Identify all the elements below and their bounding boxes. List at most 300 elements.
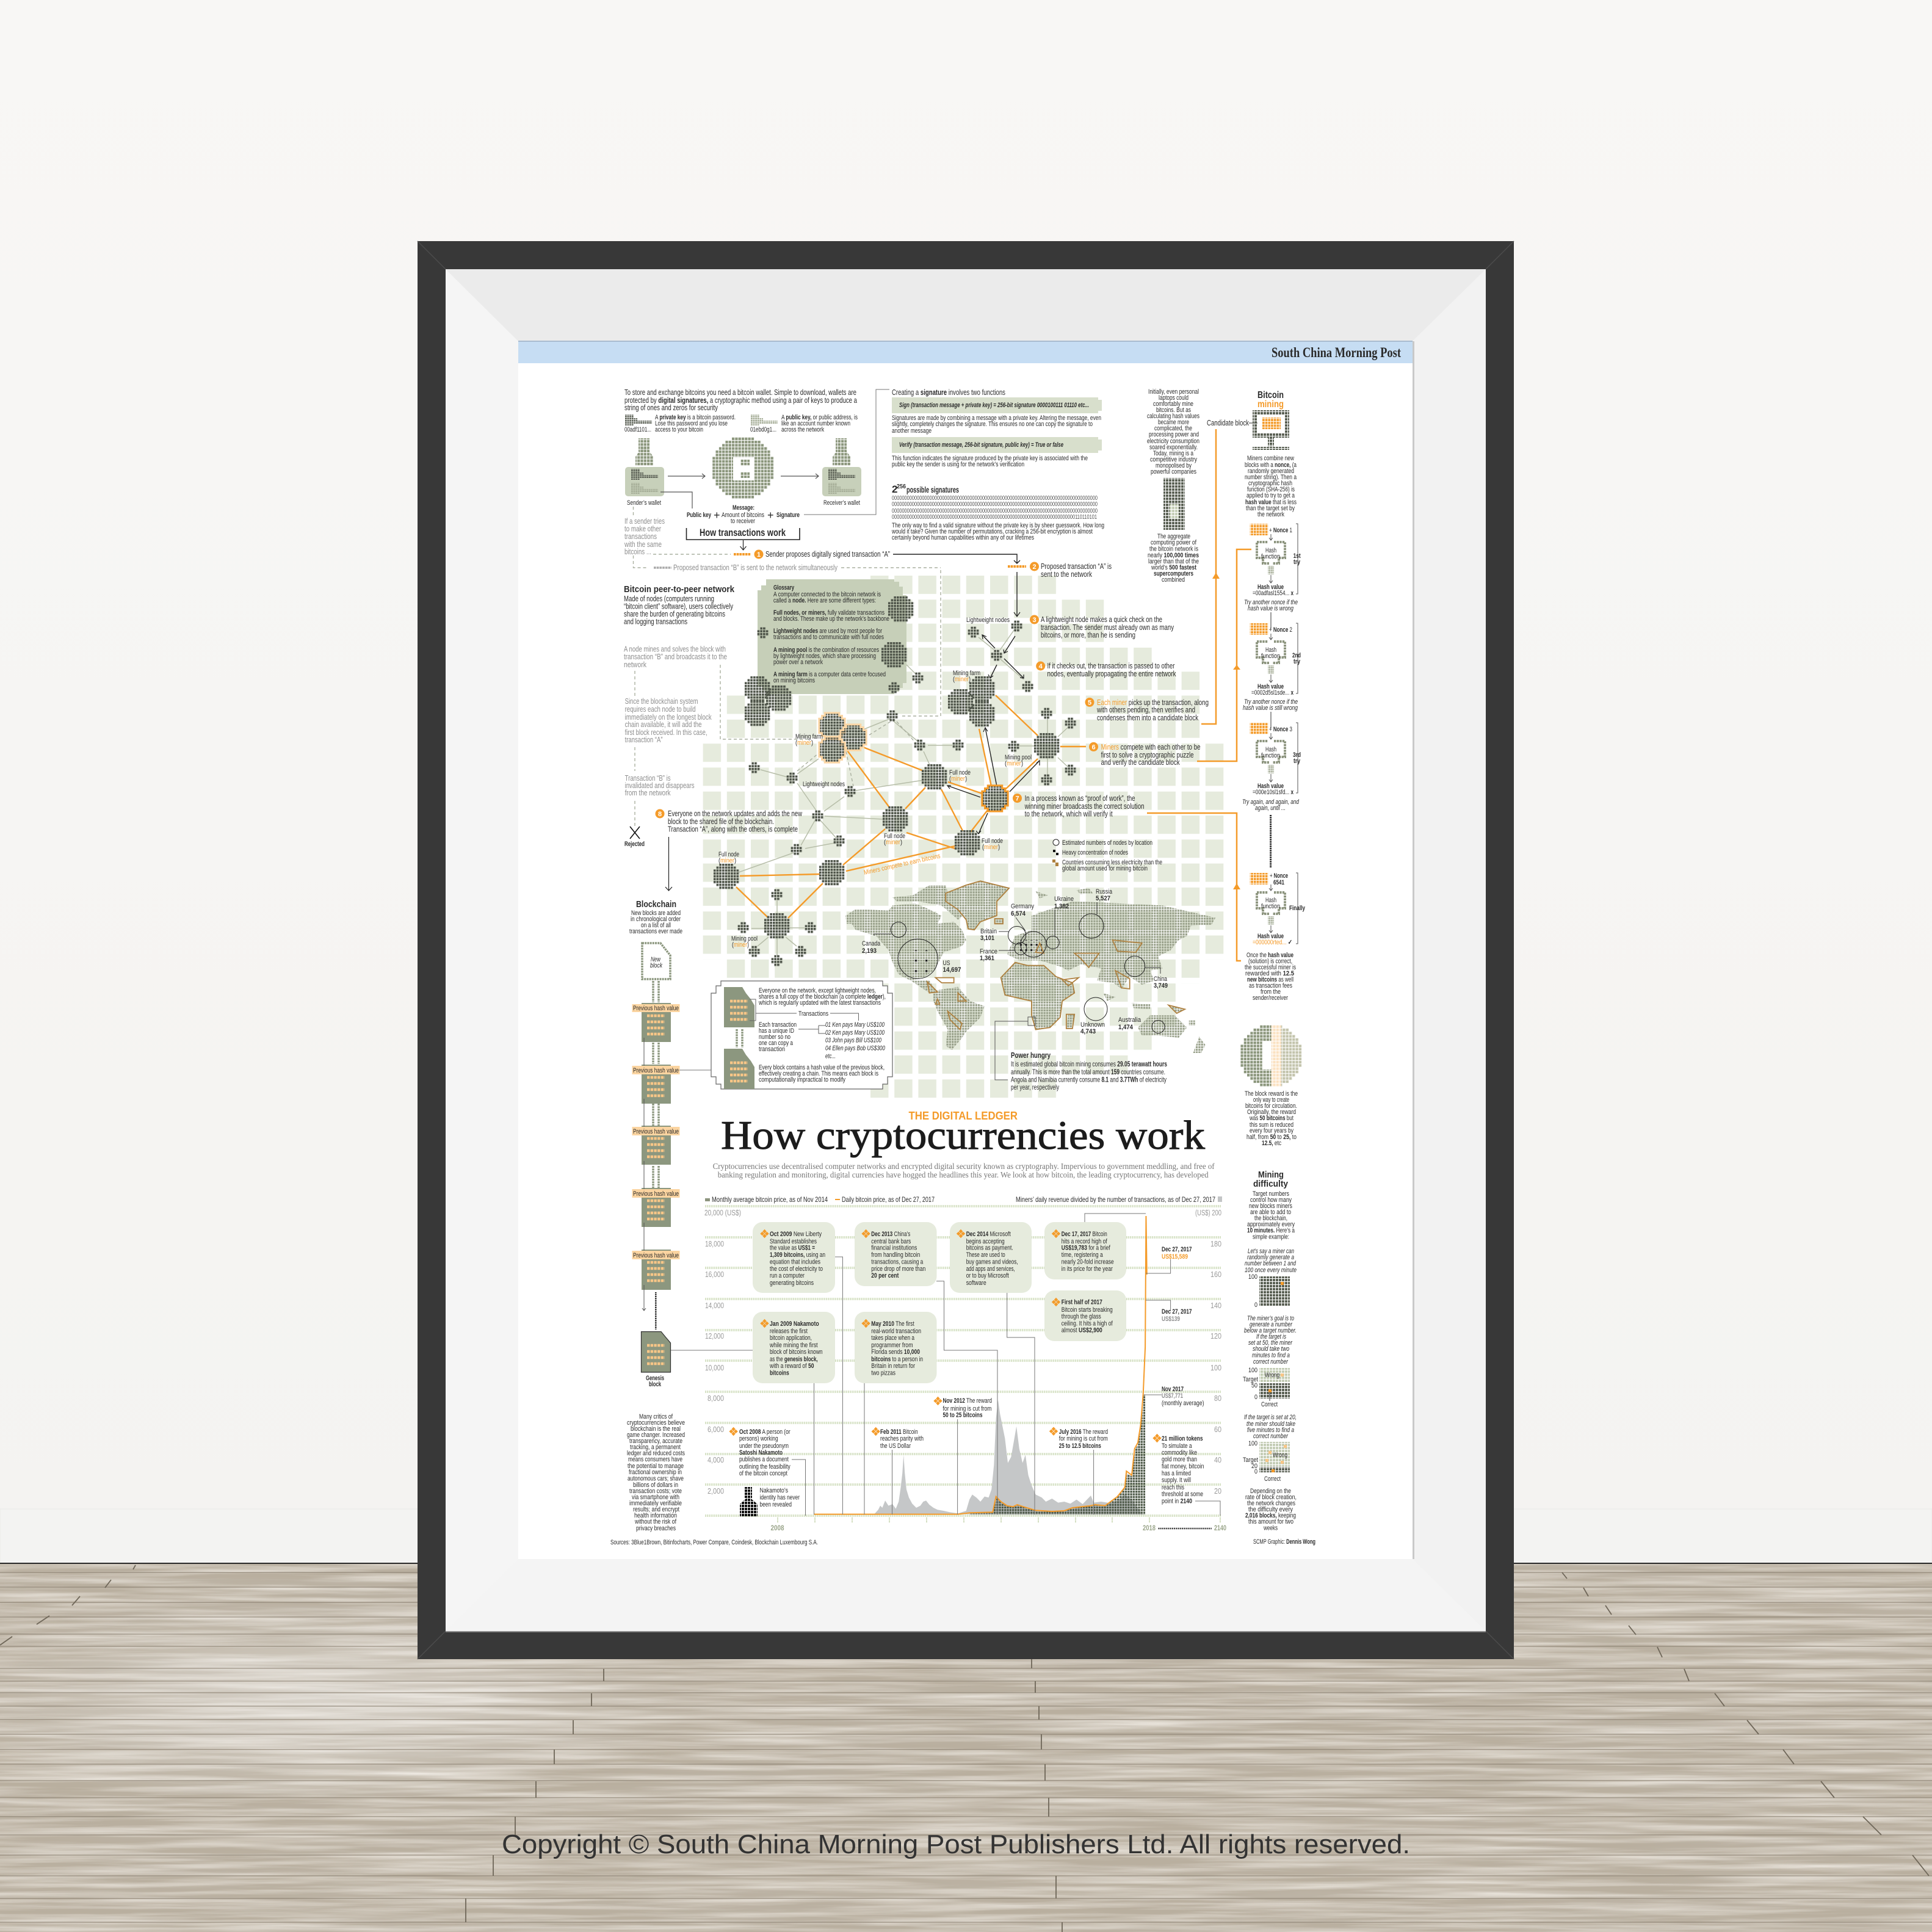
successful miner text: rewarded with 12.5: [1245, 970, 1294, 977]
price chart: [814, 1216, 1147, 1514]
final try: Finally: [1289, 905, 1306, 912]
panel: ledger callout: etc...: [825, 1052, 836, 1060]
third try: Hash value: [1257, 783, 1284, 790]
price callouts: US$139: [1162, 1315, 1180, 1323]
event: Oct 2009: 1,309 bitcoins, using an: [770, 1251, 825, 1259]
2^256 possible signatures: 0000000000000000000000000000000000000000000000000000000000000000000000000110110101: [892, 514, 1097, 521]
event: Oct 2009: Oct 2009 New Liberty: [770, 1231, 822, 1238]
panel: mining difficulty: randomly generate a: [1247, 1254, 1294, 1261]
final try: [1250, 872, 1306, 946]
chart axis labels: (US$) 200: [1195, 1209, 1221, 1217]
first try: [1244, 524, 1301, 629]
panel: ledger callout: computationally impractical to modify: [759, 1076, 845, 1084]
intro text: wallets: To store and exchange bitcoins you need a bitcoin wallet. Simple to download, wallets are: [624, 388, 856, 397]
message label: Amount of bitcoins: [722, 512, 764, 519]
panel: ledger callout: Transactions: [798, 1010, 828, 1018]
event: Dec 17, 2017: [1044, 1222, 1126, 1279]
map labels: 14,697: [942, 966, 961, 974]
event: May 2010: programmer from: [871, 1342, 913, 1349]
critics text: cryptocurrencies believe: [627, 1419, 685, 1427]
panel: ledger callout: shares a full copy of the blockchain (a complete ledger),: [759, 993, 886, 1000]
step 5: [1085, 698, 1209, 722]
grey narrative: rejected transaction B: invalidated and disappears: [625, 781, 695, 790]
final try: =000000rted... ✓: [1253, 939, 1292, 946]
panel: ledger callout: 02 Ken pays Mary US$100: [825, 1029, 885, 1037]
message label: Message:: [733, 504, 754, 512]
chart axis labels: 180: [1210, 1240, 1221, 1248]
event: Oct 2008: Satoshi Nakamoto: [739, 1449, 783, 1456]
event: May 2010: Britain in return for: [871, 1362, 915, 1370]
chart axis labels: 120: [1210, 1332, 1221, 1340]
icon: private key: [625, 414, 652, 425]
title block: banking regulation and monitoring, digital currencies have hogged the headlines this year. We look at how bitcoin, the leading cryptocurrency, has developed: [718, 1170, 1209, 1179]
critics text: transparency, accurate: [629, 1438, 682, 1445]
event: Dec 2014: software: [966, 1279, 986, 1287]
previous hash value labels: Previous hash value: [633, 1067, 679, 1074]
first try: Hash: [1265, 547, 1276, 554]
map legend: Estimated numbers of nodes by location: [1062, 839, 1152, 847]
signature explainer: This function indicates the signature produced by the private key is associated with the: [892, 455, 1088, 462]
mining explanation: function (SHA-256) is: [1247, 486, 1295, 493]
successful miner text: as transaction fees: [1249, 982, 1292, 990]
map labels: 1,382: [1054, 903, 1069, 910]
peer-to-peer text: share the burden of generating bitcoins: [624, 609, 725, 618]
critics text: billions of dollars in: [633, 1482, 678, 1489]
successful miner text: from the: [1261, 988, 1281, 996]
node labels: Mining pool: [731, 935, 758, 942]
critics text: privacy breaches: [636, 1525, 676, 1532]
grey narrative: rejected transaction B: [624, 645, 727, 797]
event: first half of 2017: First half of 2017: [1062, 1299, 1102, 1306]
critics text: without the risk of: [634, 1518, 677, 1525]
panel: block reward: half, from 50 to 25, to: [1246, 1134, 1297, 1141]
step 6: 6: [1091, 743, 1096, 751]
panel: mining difficulty: If the target is set at 20,: [1244, 1414, 1297, 1421]
map labels: France: [980, 948, 997, 955]
intro text: wallets: string of ones and zeros for security: [624, 403, 718, 412]
panel: mining difficulty: five minutes to find a: [1247, 1427, 1294, 1434]
step 7: [1013, 794, 1145, 818]
map labels: 3,101: [980, 935, 994, 942]
middle column: computing power: calculating hash values: [1147, 413, 1199, 420]
second try: hash value is still wrong: [1243, 704, 1298, 712]
panel: mining difficulty: are able to add to: [1250, 1209, 1291, 1216]
2^256 possible signatures: [891, 483, 1104, 541]
middle column: computing power: electricity consumption: [1147, 438, 1199, 445]
map labels: Australia: [1118, 1016, 1141, 1024]
first try: 1st: [1293, 552, 1301, 560]
step 8: Everyone on the network updates and adds the new: [668, 809, 802, 818]
grey narrative: rejected transaction B: transaction “A”: [625, 735, 663, 744]
title block: How cryptocurrencies work: [721, 1113, 1206, 1158]
orange process arrows to mining column: [1147, 429, 1251, 961]
signature explainer: another message: [892, 427, 932, 435]
private key text: Lose this password and you lose: [655, 420, 728, 427]
price callouts: Nov 2017: [1162, 1386, 1184, 1393]
second try: =0002d5sl1sde... x: [1251, 689, 1294, 696]
mining explanation: blocks with a nonce, (a: [1245, 461, 1297, 469]
panel: mining difficulty: If the target is: [1256, 1333, 1286, 1340]
peer-to-peer text: [624, 584, 735, 626]
event: May 2010: [855, 1312, 936, 1383]
icon: half coin: [1240, 1026, 1302, 1087]
event: Dec 17, 2017: in its price for the year: [1062, 1265, 1113, 1273]
icon: new block: [642, 943, 670, 979]
node labels: (miner): [1005, 760, 1023, 767]
final try: Hash: [1265, 897, 1276, 904]
event: Oct 2009: [753, 1222, 835, 1293]
middle column: computing power: soared exponentially.: [1149, 444, 1198, 451]
panel: mining difficulty: Let’s say a miner can: [1248, 1248, 1294, 1255]
final try: 6541: [1273, 879, 1284, 886]
grey narrative: rejected transaction B: requires each node to build: [625, 704, 696, 714]
successful miner text: sender/receiver: [1253, 994, 1288, 1002]
event: Jan 2009: releases the first: [770, 1328, 808, 1335]
panel: block reward: [1240, 1026, 1302, 1147]
chart: target 20 grid: 100: [1248, 1440, 1257, 1447]
price callouts: Dec 27, 2017: [1162, 1308, 1192, 1315]
grey links: [739, 629, 1068, 955]
mining explanation: applied to try to get a: [1246, 492, 1295, 499]
chart axis labels: 10,000: [705, 1364, 724, 1372]
event: Feb 2011: the US Dollar: [880, 1442, 911, 1450]
mining explanation: hash value that is less: [1245, 499, 1297, 506]
node labels: Full node: [982, 838, 1003, 845]
mining explanation: cryptographic hash: [1248, 480, 1292, 487]
mining explanation: [1245, 455, 1297, 518]
middle column: computing power: Today, mining is a: [1153, 450, 1194, 457]
node labels: (miner): [949, 775, 967, 783]
peer-to-peer text: and logging transactions: [624, 617, 687, 626]
chart axis labels: 4,000: [707, 1456, 724, 1464]
signature explainer: public key the sender is using for the network’s verification: [892, 461, 1024, 468]
second try: function: [1261, 653, 1280, 660]
network connection lines: [634, 507, 1086, 955]
chart legend: Daily bitcoin price, as of Dec 27, 2017: [842, 1195, 935, 1204]
chart: target 20 grid: Correct: [1264, 1475, 1281, 1483]
private key text: access to your bitcoin: [655, 426, 703, 433]
step 6: [1089, 742, 1201, 767]
previous hash value labels: Previous hash value: [633, 1005, 679, 1012]
middle column: computing power: complicated, the: [1154, 425, 1192, 432]
message label: [687, 504, 800, 525]
critics text: via smartphone with: [632, 1494, 679, 1501]
third try: try: [1293, 758, 1301, 765]
map node circles: [874, 902, 1165, 1033]
first try: =00adfasl1554... x: [1253, 590, 1294, 597]
icon: genesis block: Genesis: [646, 1375, 664, 1382]
critics text: fractional ownership in: [629, 1469, 682, 1476]
panel: mining difficulty: the miner should take: [1246, 1420, 1295, 1428]
panel: mining difficulty: 2,016 blocks, keeping: [1245, 1512, 1296, 1519]
middle column: computing power: Initially, even personal: [1148, 388, 1199, 396]
icon: bitcoin coin: [712, 438, 774, 499]
network background grid: [699, 576, 1225, 1099]
critics text: ledger and reduced costs: [627, 1450, 685, 1457]
event: Dec 2013: price drop of more than: [871, 1265, 925, 1273]
price callouts: [1162, 1246, 1204, 1407]
panel: ledger callout: Each transaction: [759, 1021, 797, 1029]
critics text: Many critics of: [639, 1413, 673, 1420]
map legend: Countries consuming less electricity than the: [1062, 859, 1162, 866]
2^256 possible signatures: 0000000000000000000000000000000000000000000000000000000000000000000000000000000000: [892, 501, 1098, 508]
panel: ledger callout: number so no: [759, 1033, 791, 1041]
panel: block reward: this sum is reduced: [1250, 1121, 1293, 1129]
map labels: 3,749: [1154, 982, 1168, 990]
third try: again, until ...: [1255, 805, 1286, 812]
event: Feb 2011: reaches parity with: [880, 1435, 924, 1442]
event: 21 million tokens: To simulate a: [1162, 1442, 1192, 1450]
timeline leader lines: [792, 1214, 1220, 1516]
event: Oct 2009: equation that includes: [770, 1259, 820, 1266]
2^256 possible signatures: certainly beyond human capabilities within any of our lifetimes: [892, 534, 1034, 541]
price callouts: (monthly average): [1162, 1400, 1204, 1407]
map labels: 6,574: [1011, 910, 1026, 917]
event: 21 million tokens: reach this: [1162, 1484, 1184, 1491]
panel: glossary: called a node. Here are some different types:: [773, 597, 876, 604]
chart gridlines: [705, 1206, 1221, 1516]
chart axis labels: 60: [1214, 1425, 1221, 1434]
successful miner text: the successful miner is: [1245, 964, 1296, 971]
step 4: nodes, eventually propagating the entire network: [1047, 669, 1176, 678]
event: Nov 2012: for mining is cut from: [942, 1405, 991, 1413]
step 5: with others pending, then verifies and: [1096, 705, 1195, 714]
event: Dec 2013: central bank bars: [871, 1238, 911, 1245]
chart axis labels: 18,000: [705, 1240, 724, 1248]
third try: + Nonce 3: [1269, 726, 1292, 733]
event: Dec 2014: [950, 1222, 1032, 1293]
2^256 possible signatures: would it take? Given the number of permutations, cracking a 256-bit encryption is almost: [891, 528, 1093, 535]
event: Dec 17, 2017: Dec 17, 2017 Bitcoin: [1062, 1231, 1107, 1238]
signature explainer: slightly, completely changes the signature. This ensures no one can copy the signature to: [892, 421, 1093, 428]
public key text: 01ebd0g1...: [750, 426, 776, 433]
event: first half of 2017: Bitcoin starts breaking: [1062, 1306, 1113, 1314]
icon: new block: New: [651, 956, 661, 963]
peer-to-peer text: Made of nodes (computers running: [624, 594, 714, 603]
grey narrative: rejected transaction B: from the network: [625, 788, 671, 797]
chart: target 50 grid: Wrong: [1265, 1372, 1279, 1379]
event: Dec 17, 2017: nearly 20-fold increase: [1062, 1259, 1114, 1266]
panel: block reward: only way to create: [1253, 1096, 1289, 1104]
panel: block reward: Originally, the reward: [1247, 1109, 1296, 1116]
step 4: [1036, 661, 1176, 678]
critics text: health information: [634, 1512, 677, 1519]
title block: Cryptocurrencies use decentralised computer networks and encrypted digital security known as cryptography. Impervious to government meddling, and free of: [713, 1162, 1215, 1171]
panel: mining difficulty: simple example:: [1253, 1233, 1289, 1240]
node labels: (miner): [718, 857, 736, 864]
panel: bitcoin mining column: mining: [1257, 399, 1284, 410]
map legend: Heavy concentration of nodes: [1062, 849, 1128, 856]
panel: mining difficulty: set at 50, the miner: [1248, 1339, 1293, 1347]
chart legend: Miners’ daily revenue divided by the number of transactions, as of Dec 27, 2017: [1016, 1195, 1215, 1204]
grey narrative: rejected transaction B: Since the blockchain system: [625, 696, 698, 706]
private key text: 00adf1101...: [624, 426, 651, 433]
panel: glossary: [758, 579, 906, 694]
middle column: computing power: became more: [1158, 419, 1189, 426]
chart axis labels: 12,000: [705, 1332, 724, 1340]
event: 21 million tokens: point in 2140: [1162, 1498, 1192, 1505]
event: first half of 2017: almost US$2,900: [1062, 1327, 1102, 1334]
event: Dec 17, 2017: hits a record high of: [1062, 1238, 1108, 1245]
panel: mining difficulty: below a target number.: [1244, 1327, 1297, 1334]
map labels: 4,743: [1080, 1028, 1096, 1035]
middle column: computing power: comfortably mine: [1153, 400, 1193, 408]
critics text: the potential to manage: [628, 1463, 684, 1470]
step 6: and verify the candidate block: [1101, 758, 1180, 767]
heading: how transactions work: How transactions work: [700, 527, 786, 538]
panel: ledger callout: Every block contains a hash value of the previous block,: [759, 1064, 885, 1071]
chart axis labels: 14,000: [705, 1301, 724, 1310]
aggregate computing text: larger than that of the: [1148, 558, 1199, 565]
panel: mining difficulty: Depending on the: [1250, 1488, 1291, 1495]
panel: glossary: Lightweight nodes are used by most people for: [773, 628, 882, 635]
node labels: Full node: [718, 851, 739, 858]
node labels: (miner): [982, 844, 1000, 851]
panel: glossary: transactions and to communicate with full nodes: [773, 634, 884, 641]
event: May 2010: May 2010 The first: [871, 1320, 914, 1328]
node labels: Mining farm: [795, 733, 823, 740]
2^256 possible signatures: The only way to find a valid signature without the private key is by sheer guesswork. How long: [892, 522, 1104, 529]
event: Dec 2013: 20 per cent: [871, 1272, 899, 1279]
step 5: Each miner picks up the transaction, along: [1097, 698, 1209, 707]
black flow arrows: [947, 572, 1040, 834]
chart axis labels: 140: [1210, 1301, 1221, 1310]
chart axis labels: 100: [1210, 1364, 1221, 1372]
event: Dec 2013: Dec 2013 China’s: [871, 1231, 911, 1238]
critics text: game changer. Increased: [627, 1431, 685, 1439]
icon: genesis block: block: [649, 1381, 662, 1388]
step 7: In a process known as “proof of work”, the: [1025, 794, 1135, 803]
chart: target 20 grid: 0: [1254, 1468, 1257, 1475]
rejected mark: Rejected: [624, 841, 645, 848]
price callouts: US$7,771: [1162, 1392, 1183, 1400]
peer-to-peer text: Bitcoin peer-to-peer network: [624, 584, 735, 595]
critics text: means consumers have: [628, 1456, 682, 1463]
panel: glossary: A mining pool is the combination of resources: [773, 646, 879, 654]
aggregate computing text: The aggregate: [1157, 533, 1190, 540]
panel: mining difficulty: 100 once every minute: [1245, 1267, 1297, 1274]
panel: mining difficulty: weeks: [1263, 1525, 1278, 1532]
step 3: [1030, 615, 1174, 640]
2^256 possible signatures: 0000000000000000000000000000000000000000000000000000000000000000000000000000000000: [892, 508, 1098, 515]
middle column: computing power: powerful companies: [1151, 468, 1196, 476]
event: Oct 2009: run a computer: [770, 1272, 805, 1279]
second try: Try another nonce if the: [1244, 698, 1298, 706]
event: Oct 2008: Oct 2008 A person (or: [739, 1428, 791, 1436]
map labels: Canada: [862, 940, 881, 947]
panel: mining difficulty: Target numbers: [1253, 1190, 1289, 1198]
grey narrative: rejected transaction B: Transaction “B” is: [625, 773, 671, 783]
critics text: immediately verifiable: [629, 1500, 682, 1507]
panel: ledger callout: 01 Ken pays Mary US$100: [825, 1021, 885, 1029]
power hungry note: Power hungry: [1011, 1051, 1051, 1060]
icon: sender wallet: [625, 438, 664, 507]
successful miner text: new bitcoins as well: [1247, 976, 1293, 983]
event: 21 million tokens: [1152, 1434, 1204, 1505]
middle column: computing power: competitive industry: [1150, 456, 1197, 463]
icon: supercomputer stack: [1163, 478, 1185, 530]
event: Dec 2014: add apps and services,: [966, 1265, 1015, 1273]
grey text: double spend: to make other: [624, 524, 661, 534]
2^256 possible signatures: possible signatures: [906, 485, 959, 494]
panel: ledger callout: Everyone on the network, except lightweight nodes,: [759, 987, 876, 994]
panel: ledger callout: which is regularly updated with the latest transactions: [758, 999, 881, 1007]
panel: glossary: A mining farm is a computer data centre focused: [773, 671, 886, 678]
panel: mining difficulty: number between 1 and: [1245, 1260, 1297, 1267]
chart axis labels: 20: [1214, 1487, 1221, 1496]
price callouts: US$15,589: [1162, 1253, 1188, 1261]
panel: ledger callout: effectively creating a chain. This means each block is: [759, 1070, 878, 1077]
panel: mining difficulty: generate a number: [1250, 1321, 1293, 1328]
aggregate computing text: world’s 500 fastest: [1151, 564, 1196, 571]
panel: ledger callout: [679, 981, 892, 1089]
2^256 possible signatures: 256: [897, 483, 906, 490]
step 1: Sender proposes digitally signed transaction “A”: [765, 549, 890, 559]
event: 21 million tokens: commodity like: [1162, 1449, 1197, 1456]
panel: ledger callout: has a unique ID: [759, 1027, 794, 1035]
chart legend: [705, 1195, 1222, 1204]
map labels: 1,474: [1118, 1024, 1134, 1031]
node labels: Lightweight nodes: [803, 781, 845, 788]
panel: ledger callout: transaction: [759, 1046, 785, 1053]
event: Nov 2012: 50 to 25 bitcoins: [942, 1412, 983, 1419]
event: 21 million tokens: fiat money, bitcoin: [1162, 1463, 1204, 1471]
panel: mining difficulty: the difficulty every: [1248, 1506, 1293, 1513]
panel: glossary: and blocks. These make up the network’s backbone: [773, 615, 889, 623]
power hungry note: per year, respectively: [1011, 1083, 1059, 1091]
event: Jan 2009: while mining the first: [769, 1342, 818, 1349]
2^256 possible signatures: 2: [892, 483, 897, 495]
event: Oct 2008: [729, 1427, 791, 1477]
panel: blockchain column: transactions ever made: [629, 928, 682, 935]
power hungry note: Angola and Namibia currently consume 8.1 and 3.7TWh of electricity: [1011, 1076, 1167, 1084]
chart: target 50 grid: Correct: [1261, 1401, 1278, 1408]
grey narrative: rejected transaction B: chain available, it will add the: [625, 720, 702, 729]
second try: try: [1293, 658, 1301, 665]
event: Feb 2011: [872, 1427, 924, 1450]
revenue per transaction area: [874, 1400, 1145, 1514]
peer-to-peer text: “bitcoin client” software), users collectively: [624, 602, 733, 610]
event: May 2010: Florida sends 10,000: [871, 1348, 920, 1356]
final try: + Nonce: [1270, 872, 1288, 880]
proposed transaction B: Proposed transaction “B” is sent to the network simultaneously: [673, 563, 838, 572]
chart axis labels: 2,000: [707, 1487, 724, 1496]
panel: mining difficulty: difficulty: [1253, 1179, 1289, 1189]
panel: mining difficulty: correct number: [1253, 1358, 1289, 1366]
mining explanation: than the target set by: [1246, 505, 1295, 512]
map legend: [1052, 839, 1162, 872]
panel: mining difficulty: minutes to find a: [1252, 1351, 1290, 1359]
previous hash value labels: Previous hash value: [633, 1190, 679, 1198]
panel: mining difficulty: the blockchain,: [1254, 1215, 1287, 1222]
middle column: computing power: [1147, 388, 1199, 476]
icon: receiver wallet: Receiver’s wallet: [823, 499, 860, 507]
panel: glossary: by lightweight nodes, which share processing: [773, 653, 876, 660]
panel: mining difficulty: new blocks miners: [1249, 1203, 1292, 1210]
chart axis labels: 160: [1210, 1270, 1221, 1279]
panel: mining difficulty: correct number: [1253, 1433, 1289, 1440]
masthead bar: South China Morning Post: [1272, 345, 1401, 360]
chart axis labels: 16,000: [705, 1270, 724, 1279]
chart: target 50 grid: [1243, 1367, 1290, 1408]
first try: try: [1293, 559, 1301, 566]
event: Jan 2009: [753, 1312, 835, 1383]
chart axis labels: 80: [1214, 1394, 1221, 1403]
node labels: Mining pool: [1005, 754, 1032, 761]
step 6: Miners compete with each other to be: [1101, 742, 1201, 751]
map legend: global amount used for mining bitcoin: [1062, 865, 1148, 872]
event: July 2016: [1049, 1427, 1108, 1450]
